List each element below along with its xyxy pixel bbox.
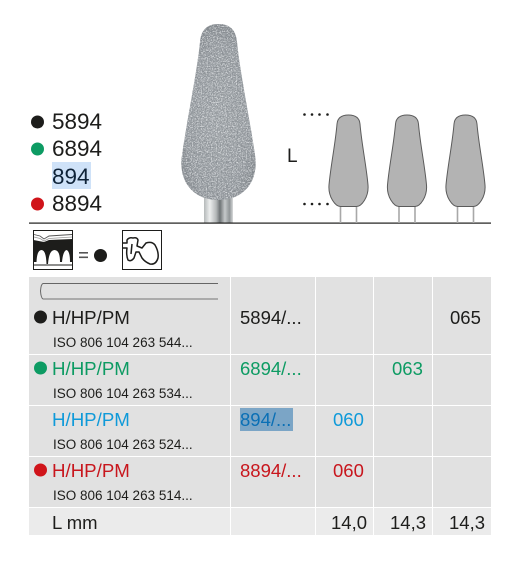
length marker L [287,113,329,205]
legend item 6894: 6894 [52,136,102,161]
table [29,277,491,535]
row 894: 060 [333,409,364,430]
silhouette 060 [329,115,368,223]
row 6894: H/HP/PM [52,358,130,379]
silhouette 065 [446,115,485,223]
row 8894: ISO 806 104 263 514... [53,488,193,503]
legend: article numbers [31,109,102,216]
L label: L [287,146,298,167]
row 5894: ISO 806 104 263 544... [53,335,193,350]
legend item 894 highlighted: 894 [52,164,90,189]
row 8894: 060 [333,460,364,481]
icon: shank profile [40,284,218,299]
row 5894 [34,307,481,350]
row 5894: 5894/... [240,307,302,328]
bur size silhouettes [329,115,485,223]
row 894 [52,408,364,452]
row L mm: 14,3 [390,512,426,533]
row 894: ISO 806 104 263 524... [53,437,193,452]
dotted bottom marker [303,203,329,205]
row 8894: H/HP/PM [52,460,130,481]
row L mm: L mm [52,512,98,533]
legend item 8894: 8894 [52,191,102,216]
dotted top marker [303,113,329,116]
diamond bur photo [178,20,258,223]
table background [29,277,491,535]
row L mm: 14,0 [331,512,367,533]
row L mm [52,512,485,533]
row L mm: 14,3 [449,512,485,533]
row 8894 [34,460,364,503]
silhouette 063 [387,115,427,223]
row 6894: ISO 806 104 263 534... [53,386,193,401]
cell grid [29,277,491,535]
icon: full dentition equals black dot [34,230,107,270]
row 894: 894/... [240,409,291,430]
row 6894: 063 [392,358,423,379]
L mm row background [29,508,491,535]
row 6894 [34,358,423,401]
row 6894: 6894/... [240,358,302,379]
row 8894: 8894/... [240,460,302,481]
row 5894: 065 [450,307,481,328]
row 894: H/HP/PM [52,409,130,430]
base line [29,222,491,224]
row 5894: H/HP/PM [52,307,130,328]
icon: crown preparation [122,230,162,270]
legend item 5894: 5894 [52,109,102,134]
